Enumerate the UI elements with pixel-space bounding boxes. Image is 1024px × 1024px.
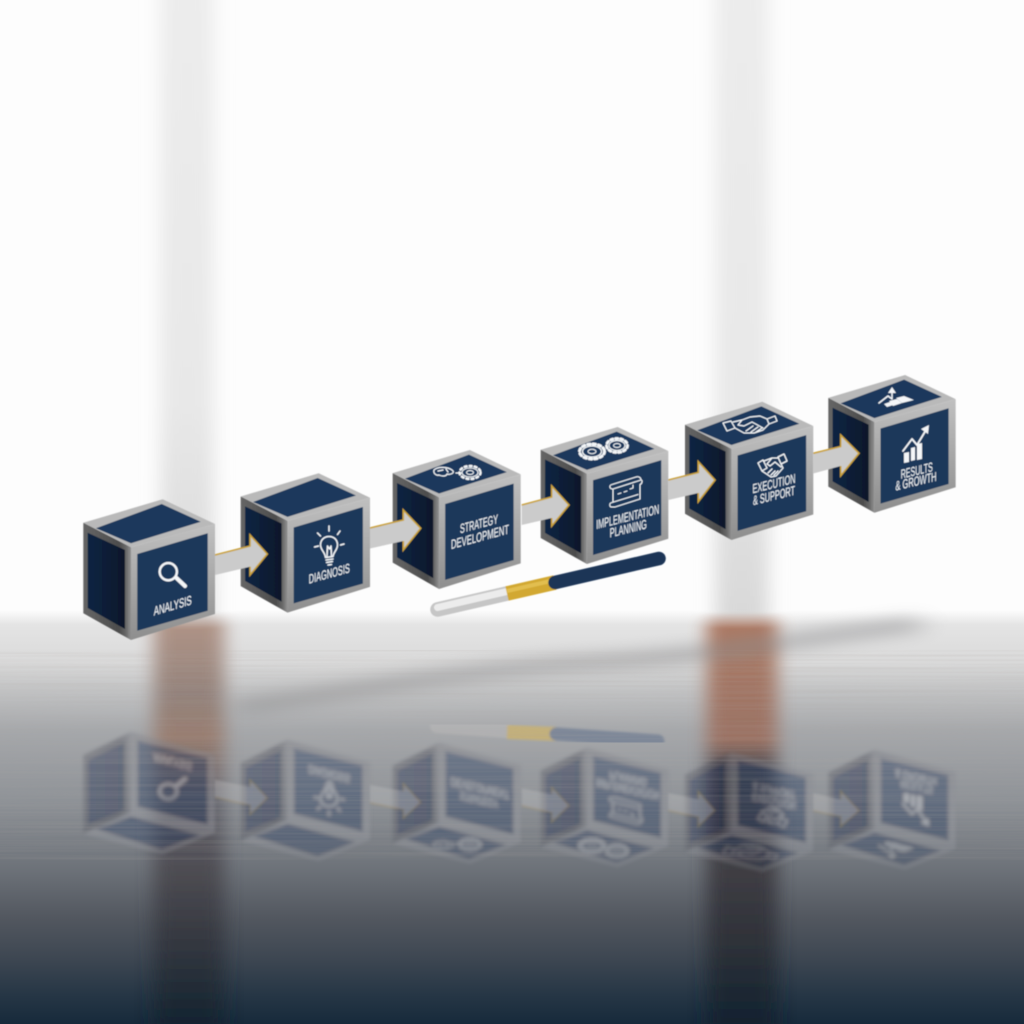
arrow: diagnosis to strategy [370,510,421,550]
label: results and growth: & GROWTH [896,469,936,494]
icon: growth chart [903,425,929,463]
blurred wall column left [160,0,214,640]
process cubes [83,375,956,640]
icon: blueprint scroll [610,477,642,507]
icon: gears on top face [580,438,628,459]
label: results and growth: RESULTS [901,459,933,482]
label: implementation planning: IMPLEMENTATION [596,502,659,532]
label: results and growth [896,459,936,494]
copper column reflection right [707,612,777,1024]
wand shadow on floor [235,624,920,708]
background wall [0,0,1024,640]
copper column reflection left [154,612,224,1024]
cube 4: implementation planning [541,427,668,564]
icon: brain and gear on top face [434,466,480,479]
icon: magnifying glass [160,563,185,586]
label: analysis: ANALYSIS [154,593,192,619]
floating baton [438,558,659,610]
cube 5: execution and support [685,402,813,540]
label: execution and support [752,471,796,508]
reflective floor [0,610,1024,1024]
label: execution and support: & SUPPORT [753,483,795,508]
arrow: strategy to implementation [522,486,569,526]
cube 2: diagnosis [241,473,370,613]
arrow: analysis to diagnosis [215,535,267,575]
wand reflection [437,726,658,741]
label: implementation planning: PLANNING [610,517,647,541]
label: execution and support: EXECUTION [752,471,796,496]
label: strategy development [451,511,509,552]
cube reflections [83,732,956,872]
label: diagnosis: DIAGNOSIS [309,560,350,587]
cube 6: results and growth [828,375,956,513]
icon: light bulb [314,526,344,565]
arrow reflections [215,780,859,827]
blurred wall column right [715,0,769,640]
cube 1: analysis [83,499,215,640]
cube 3: strategy development [393,450,521,589]
arrow: execution to results [813,435,859,476]
label: strategy development: STRATEGY [460,511,498,536]
arrow: implementation to execution [668,462,715,502]
icon: handshake on top face [723,416,777,433]
icon: handshake [758,454,787,477]
label: strategy development: DEVELOPMENT [451,522,509,552]
label: implementation planning [596,502,659,541]
floor streaks [0,650,1024,860]
icon: flattened bar chart on top face [879,387,914,407]
